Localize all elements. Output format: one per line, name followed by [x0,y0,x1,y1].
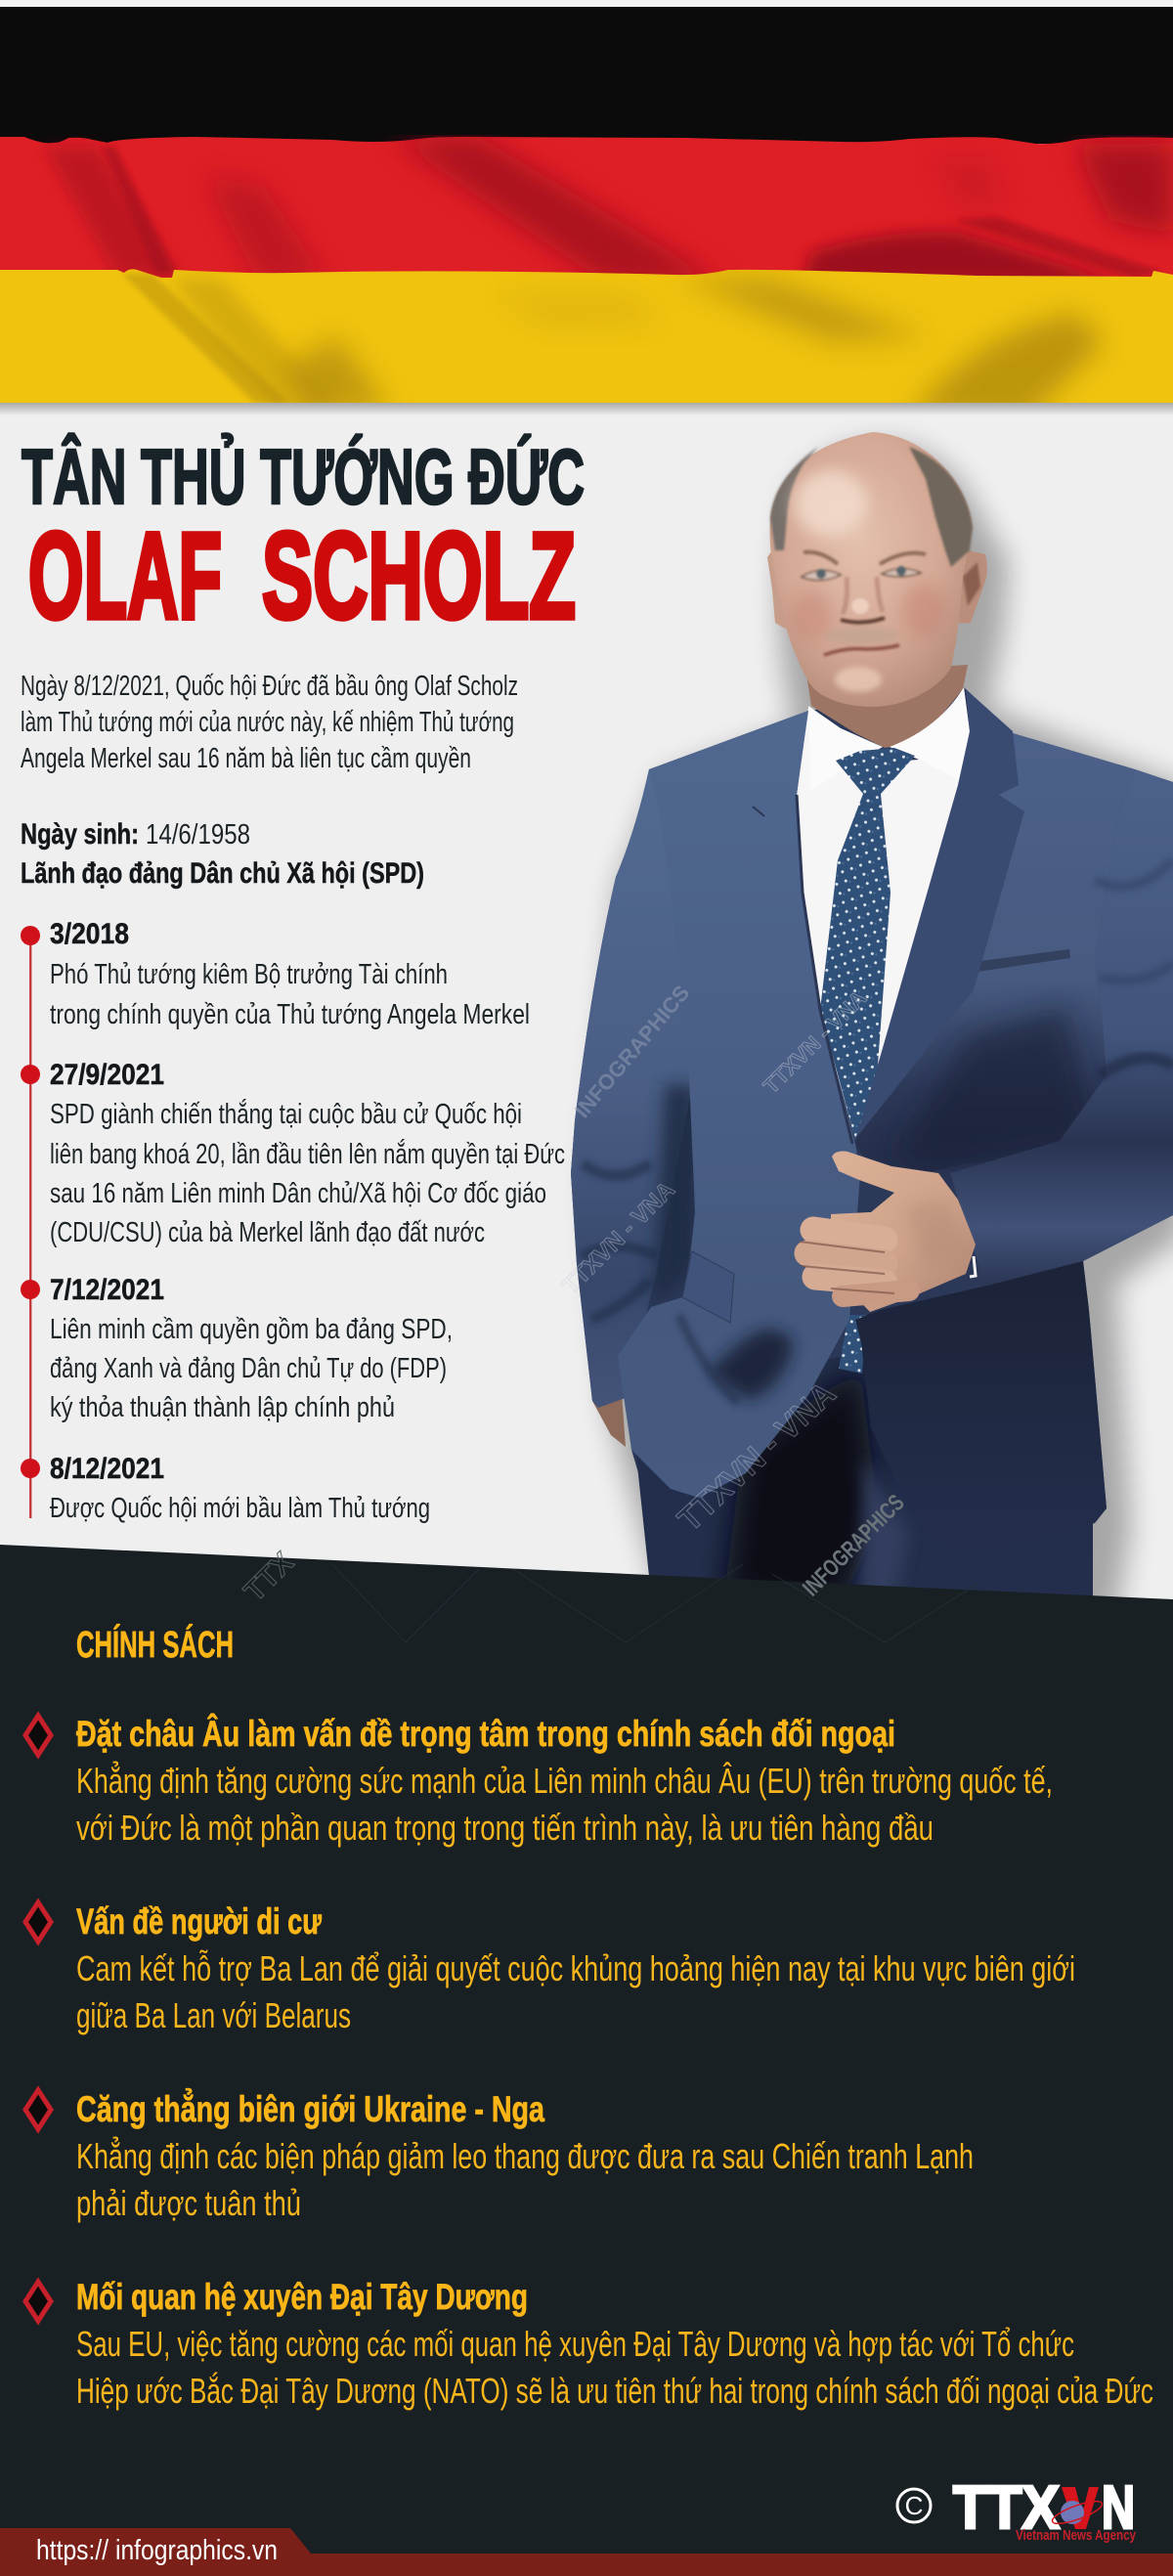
timeline [21,918,565,1524]
panel watermarks: INFOGRAPHICS [798,1490,910,1601]
birth date and party [21,818,424,890]
collar [808,687,970,760]
timeline entry: 8/12/2021: 8/12/2021 [50,1453,164,1485]
right lapel [855,689,1024,1139]
trousers [635,1349,1093,1613]
timeline entry: 7/12/2021: Liên minh cầm quyền gồm ba đảng SPD, [50,1314,453,1345]
birth date and party: Lãnh đạo đảng Dân chủ Xã hội (SPD) [21,857,424,890]
neck [806,665,968,748]
body base [571,687,1173,1613]
policy 2 [25,1901,1075,2035]
policy 3 [25,2088,974,2223]
pocket flap left [682,1251,734,1323]
panel watermarks [239,1490,910,1608]
icon: diamond bullet [25,1902,51,1942]
logo: TTXVN: N [1102,2474,1135,2542]
left jacket front [618,711,860,1498]
logo: TTXVN: TTX [953,2474,1060,2542]
timeline entry: 27/9/2021: liên bang khoá 20, lần đầu tiên lên nắm quyền tại Đức [50,1138,565,1170]
watermarks on person: TTXVN - VNA [759,985,871,1099]
logo: TTXVN: Vietnam News Agency [1016,2527,1137,2544]
logo: TTXVN: C [905,2491,923,2520]
hair [770,447,973,567]
policy 1: với Đức là một phần quan trọng trong tiến trình này, là ưu tiên hàng đầu [76,1808,934,1848]
birth date and party: 14/6/1958 [146,819,250,851]
policy 4: Mối quan hệ xuyên Đại Tây Dương [76,2277,528,2317]
policy 1 [25,1713,1053,1848]
title: Olaf Scholz: OLAF [28,508,222,644]
icon: diamond bullet [25,2090,51,2129]
title: Olaf Scholz [28,508,576,644]
policy 1: Đặt châu Âu làm vấn đề trọng tâm trong chính sách đối ngoại [76,1713,895,1754]
flag banner [0,0,1173,420]
birth date and party: Ngày sinh: [21,818,139,851]
breast pocket [979,949,1070,972]
intro text block: làm Thủ tướng mới của nước này, kế nhiệm Thủ tướng [21,707,514,738]
heading: Chính sách: CHÍNH SÁCH [76,1623,234,1666]
head [767,432,987,707]
timeline entry: 27/9/2021: 27/9/2021 [50,1059,164,1091]
facial features [802,552,926,655]
intro text block [21,671,518,774]
footer url: https:// infographics.vn [36,2535,278,2566]
intro text block: Angela Merkel sau 16 năm bà liên tục cầm quyền [21,743,471,774]
watermarks on person: TTXVN - VNA [557,1177,680,1299]
timeline entry: 8/12/2021 [21,1453,430,1524]
policy 4 [25,2277,1153,2411]
policy 2: giữa Ba Lan với Belarus [76,1995,351,2035]
hand [800,1152,976,1312]
timeline line [29,936,31,1518]
policy 3: phải được tuân thủ [76,2183,301,2223]
panel: policies [0,1490,1173,2576]
tie [820,748,915,1374]
lower right jacket [855,1261,1107,1551]
timeline entry: 3/2018: 3/2018 [50,918,129,950]
logo: TTXVN [897,2474,1137,2544]
portrait shadow [588,444,1173,1617]
timeline entry: 7/12/2021: đảng Xanh và đảng Dân chủ Tự do (FDP) [50,1353,447,1384]
timeline entry: 27/9/2021: (CDU/CSU) của bà Merkel lãnh đạo đất nước [50,1217,485,1248]
timeline entry: 8/12/2021: Được Quốc hội mới bầu làm Thủ tướng [50,1493,430,1524]
watermarks on person [557,981,871,1539]
icon: diamond bullet [25,1716,51,1755]
timeline entry: 7/12/2021: 7/12/2021 [50,1274,164,1306]
left sleeve [571,769,696,1408]
person portrait [557,432,1173,1617]
timeline entry: 7/12/2021: ký thỏa thuận thành lập chính phủ [50,1392,395,1423]
face shading [794,470,868,537]
right jacket front [855,733,1135,1183]
watermarks on person: TTXVN - VNA [672,1375,843,1539]
title: Tân Thủ tướng Đức: TÂN THỦ TƯỚNG ĐỨC [22,433,585,520]
policy 3: Căng thẳng biên giới Ukraine - Nga [76,2088,544,2129]
watermarks on person: INFOGRAPHICS [570,981,694,1122]
timeline entry: 3/2018 [21,918,530,1030]
policy 2: Vấn đề người di cư [76,1901,322,1942]
footer band [0,2528,1173,2576]
right sleeve [950,769,1173,1302]
icon: diamond bullet [25,2282,51,2321]
timeline entry: 3/2018: Phó Thủ tướng kiêm Bộ trưởng Tài chính [50,959,448,990]
timeline entry: 27/9/2021 [21,1059,565,1248]
timeline entry: 27/9/2021: SPD giành chiến thắng tại cuộc bầu cử Quốc hội [50,1098,522,1130]
left hand behind jacket [592,1399,626,1447]
intro text block: Ngày 8/12/2021, Quốc hội Đức đã bầu ông Olaf Scholz [21,671,518,702]
timeline entry: 3/2018: trong chính quyền của Thủ tướng Angela Merkel [50,999,530,1030]
title: Olaf Scholz: SCHOLZ [262,508,576,644]
shirt [797,687,970,1139]
panel watermarks: TTX [239,1547,300,1608]
timeline entry: 7/12/2021 [21,1274,453,1423]
timeline entry: 27/9/2021: sau 16 năm Liên minh Dân chủ/Xã hội Cơ đốc giáo [50,1178,546,1209]
